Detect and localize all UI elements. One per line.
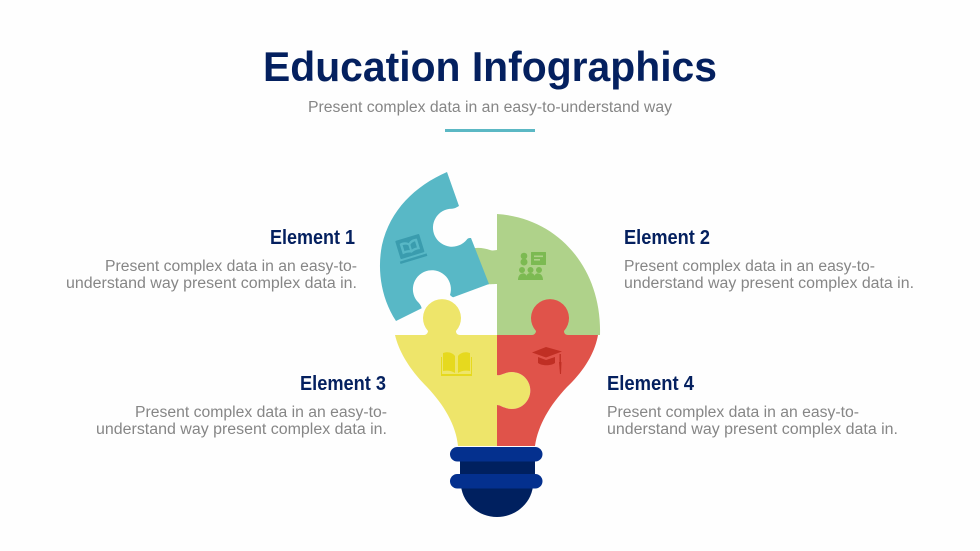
subtitle: Present complex data in an easy-to-understand way <box>308 99 672 116</box>
element 4 heading: Element 4 <box>607 373 695 395</box>
element 2 heading: Element 2 <box>624 227 710 249</box>
base dome <box>461 486 533 517</box>
icon: open book <box>441 352 472 376</box>
element 2 <box>624 227 914 292</box>
element 3 text: Present complex data in an easy-to- <box>135 404 387 421</box>
element 4 text: understand way present complex data in. <box>607 421 898 438</box>
icon: graduation cap <box>532 347 562 374</box>
lightbulb puzzle <box>380 172 600 517</box>
element 1 text: Present complex data in an easy-to- <box>105 258 357 275</box>
element 2 text: understand way present complex data in. <box>624 275 914 292</box>
element 1 <box>66 227 357 292</box>
element 1 heading: Element 1 <box>270 227 355 249</box>
element 4 <box>607 373 898 438</box>
title: Education Infographics <box>263 43 717 90</box>
element 3 <box>96 373 387 438</box>
lower base ring <box>450 474 542 488</box>
puzzle piece: blue <box>380 172 489 321</box>
base neck <box>460 459 535 476</box>
puzzle piece: red <box>497 299 598 446</box>
puzzle piece: green <box>470 214 600 335</box>
element 3 text: understand way present complex data in. <box>96 421 387 438</box>
icon: classroom <box>518 252 546 280</box>
title underline accent <box>445 129 535 132</box>
puzzle piece: yellow <box>395 299 530 446</box>
upper base ring <box>450 447 542 462</box>
element 2 text: Present complex data in an easy-to- <box>624 258 875 275</box>
bulb base <box>450 447 542 517</box>
element 3 heading: Element 3 <box>300 373 386 395</box>
element 4 text: Present complex data in an easy-to- <box>607 404 859 421</box>
icon: laptop with book <box>394 233 427 264</box>
element 1 text: understand way present complex data in. <box>66 275 357 292</box>
